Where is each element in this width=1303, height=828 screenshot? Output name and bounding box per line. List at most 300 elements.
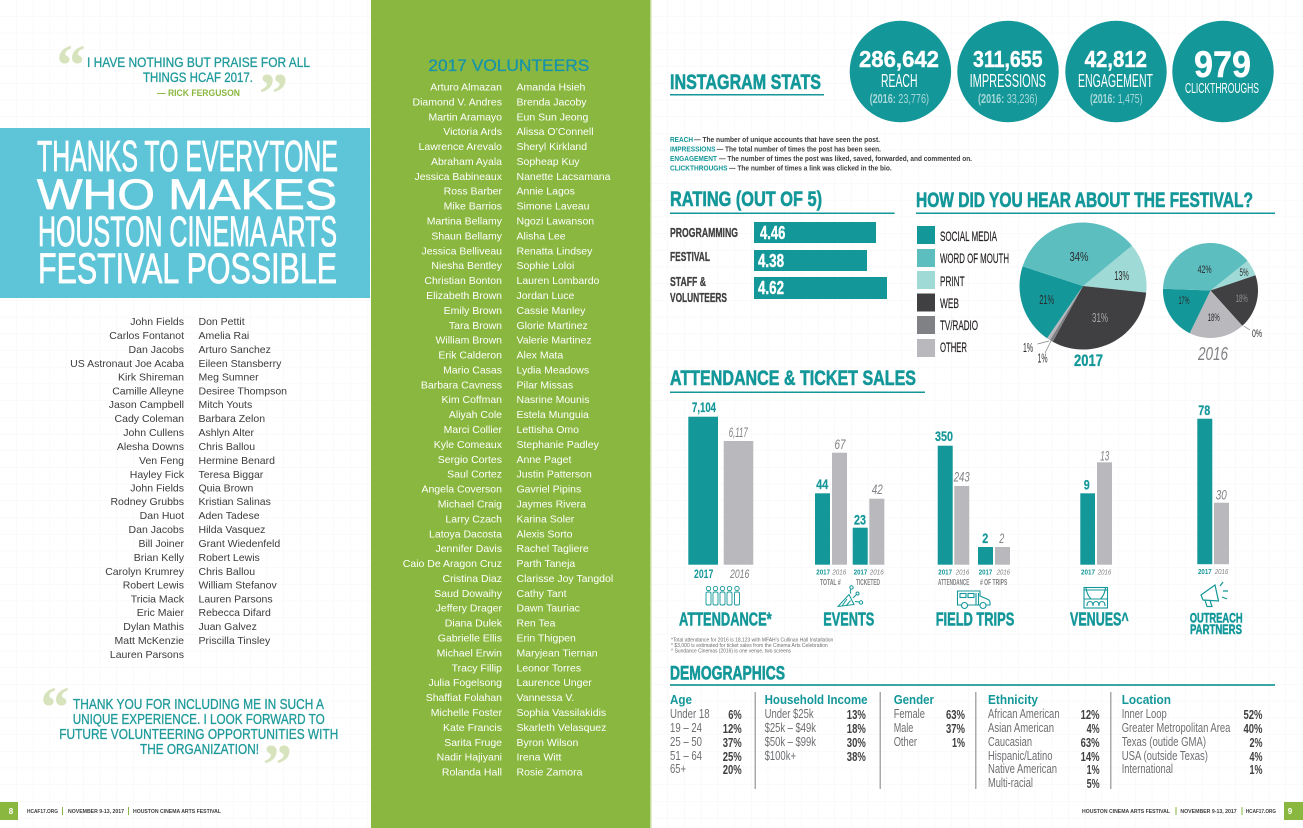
title banner: WHO MAKES — [37, 171, 337, 219]
list: volunteers, left column: Kate Francis — [443, 722, 502, 734]
list: volunteers, right column: Nanette Lacsamana — [516, 171, 611, 183]
list: volunteers, left column: Elizabeth Brown — [426, 290, 502, 302]
title banner: FESTIVAL POSSIBLE — [38, 245, 337, 293]
list: volunteers, right column: Renatta Lindsey — [516, 245, 593, 257]
list: volunteers, right column: Glorie Martinez — [516, 320, 588, 332]
list: volunteers, right column: Clarisse Joy Tangdol — [516, 573, 613, 585]
pie chart: 2016 — [1163, 243, 1262, 364]
quote: Rick Ferguson: — RICK FERGUSON — [157, 88, 240, 99]
table: gender — [894, 692, 965, 750]
heading: demographics: DEMOGRAPHICS — [670, 664, 785, 684]
stat circle: impressions: 311,655 — [973, 46, 1042, 72]
list: volunteers, left column: Victoria Ards — [443, 126, 502, 138]
table: ethnicity: Multi-racial — [988, 775, 1033, 790]
list: thank-you names, left column: Lauren Parsons — [110, 649, 184, 661]
heading: 2017 volunteers: 2017 VOLUNTEERS — [428, 56, 589, 75]
list: thank-you names, right column: Mitch Youts — [198, 399, 252, 411]
quote: volunteer thank you: THANK YOU FOR INCLUDING ME IN SUCH A — [73, 697, 324, 713]
bar chart: rating: 4.38 — [758, 251, 784, 271]
list: volunteers, left column: Barbara Cavness — [421, 379, 502, 391]
list: volunteers, left column: Marci Collier — [444, 424, 502, 436]
list: volunteers, right column: Laurence Unger — [516, 677, 592, 689]
table: household income: 38% — [847, 750, 866, 764]
list: volunteers, left column: Jeffery Drager — [436, 603, 502, 615]
table: ethnicity: African American — [988, 706, 1060, 721]
list: volunteers, right column: Sopheap Kuy — [516, 156, 580, 168]
footer: right page: HCAF17.ORG — [1246, 809, 1276, 815]
list: volunteers, left column: Tracy Fillip — [452, 662, 502, 674]
table: ethnicity: 1% — [1087, 763, 1100, 777]
legend: source of awareness: WORD OF MOUTH — [940, 250, 1009, 266]
table: gender: 37% — [946, 722, 965, 736]
quote: Rick Ferguson: I HAVE NOTHING BUT PRAISE FOR ALL — [87, 55, 310, 70]
list: volunteers, left column: Julia Fogelsong — [428, 677, 502, 689]
list: thank-you names, left column: Bill Joiner — [138, 538, 184, 550]
bar chart: rating: FESTIVAL — [670, 249, 710, 264]
bar chart: venues: 2016 — [1097, 568, 1112, 576]
icon: party popper — [838, 586, 863, 606]
list: thank-you names, left column: Ven Feng — [139, 455, 184, 467]
list: thank-you names, left column: Brian Kelly — [134, 552, 185, 564]
list: volunteers, left column — [403, 82, 503, 778]
list: thank-you names, left column: Kirk Shireman — [118, 372, 184, 384]
table: age: 12% — [723, 722, 742, 736]
quote: volunteer thank you: “ — [40, 674, 70, 740]
list: thank-you names, left column: Camille Alleyne — [112, 386, 184, 398]
bar chart: venues — [1070, 448, 1129, 630]
list: volunteers, right column: Sheryl Kirkland — [516, 141, 587, 153]
pie chart: 2017: 34% — [1070, 249, 1089, 264]
list: thank-you names, left column: Carlos Fontanot — [109, 330, 184, 342]
legend: source of awareness: WEB — [940, 295, 959, 311]
legend: source of awareness: OTHER — [940, 339, 967, 355]
text block: metric definitions: — The number of times a link was clicked in the bio. — [729, 164, 892, 172]
table: location: Texas (outide GMA) — [1122, 734, 1206, 749]
quote: Rick Ferguson — [56, 32, 310, 126]
table: location: Location — [1122, 692, 1171, 707]
list: thank-you names, left column: Dan Jacobs — [129, 524, 184, 536]
pie chart: 2016: 5% — [1240, 267, 1249, 279]
label: events: EVENTS — [823, 609, 874, 630]
pie chart: 2017: 13% — [1114, 268, 1129, 283]
list: volunteers, right column: Alexis Sorto — [516, 528, 573, 540]
list: thank-you names, right column: Amelia Rai — [198, 330, 249, 342]
footnotes — [671, 638, 833, 654]
bar chart: field trips: 243 — [953, 468, 970, 484]
stat circle: reach: (2016: 23,776) — [870, 91, 929, 106]
stat circle: engagement: (2016: 1,475) — [1090, 91, 1142, 106]
list: volunteers, left column: Saud Dowaihy — [434, 588, 503, 600]
text block: metric definitions: IMPRESSIONS — [670, 144, 716, 154]
pie chart: 2017: 1% — [1023, 340, 1033, 355]
bar chart: outreach partners: PARTNERS — [1190, 621, 1242, 637]
list: volunteers, left column: Larry Czach — [445, 513, 502, 525]
list: volunteers, right column: Lauren Lombardo — [516, 275, 600, 287]
list: volunteers, right column: Lettisha Omo — [516, 424, 579, 436]
stat circle: impressions: (2016: 33,236) — [978, 91, 1038, 106]
table: ethnicity — [988, 692, 1100, 791]
footer: left page: NOVEMBER 9-13, 2017 — [68, 809, 124, 815]
bar chart: venues: 9 — [1084, 476, 1090, 492]
list: volunteers, left column: Jessica Belliveau — [421, 245, 502, 257]
table: age — [670, 692, 742, 777]
footnotes: ^ Sundance Cinemas (2016) is one venue, two screens — [671, 648, 791, 654]
list: volunteers, right column: Simone Laveau — [516, 201, 590, 213]
stat circle: engagement: ENGAGEMENT — [1078, 71, 1153, 91]
bar chart: attendance — [679, 399, 772, 630]
pie chart: 2016: 42% — [1198, 264, 1212, 276]
list: volunteers, left column: Jennifer Davis — [435, 543, 502, 555]
list: volunteers, right column: Rachel Tagliere — [516, 543, 589, 555]
table: household income: 18% — [847, 722, 866, 736]
table: ethnicity: Asian American — [988, 720, 1054, 735]
footer: left page: HOUSTON CINEMA ARTS FESTIVAL — [133, 809, 222, 815]
stat circle: clickthroughs: 979 — [1194, 44, 1251, 85]
footer: right page: NOVEMBER 9-13, 2017 — [1180, 809, 1237, 815]
bar chart: rating: PROGRAMMING — [670, 225, 738, 240]
list: thank-you names, left column: Dan Huot — [140, 510, 184, 522]
list: volunteers, right column: Alex Mata — [516, 350, 563, 362]
pie chart: 2016: 18% — [1208, 312, 1220, 324]
quote: volunteer thank you — [40, 674, 338, 798]
list: thank-you names, right column — [198, 316, 287, 647]
list: volunteers, right column: Byron Wilson — [516, 737, 579, 749]
list: volunteers, right column: Brenda Jacoby — [516, 96, 587, 108]
list: volunteers, left column: Diamond V. Andres — [412, 96, 502, 108]
list: volunteers, right column: Gavriel Pipins — [516, 484, 581, 496]
table: household income — [765, 692, 868, 764]
list: thank-you names, right column: Barbara Zelon — [198, 413, 265, 425]
list: volunteers, right column — [516, 82, 613, 778]
pie chart: 2017: 2017 — [1074, 351, 1103, 370]
list: thank-you names, right column: Quia Brown — [198, 482, 254, 494]
table: location: 52% — [1244, 708, 1262, 722]
table: location: 1% — [1250, 763, 1262, 777]
list: volunteers, left column: Latoya Dacosta — [429, 528, 502, 540]
table: gender: Other — [894, 734, 917, 749]
bar chart: field trips: 2016 — [955, 568, 970, 576]
list: volunteers, left column: Abraham Ayala — [431, 156, 502, 168]
table: gender: Gender — [894, 692, 934, 707]
panel: 2017 volunteers — [371, 0, 650, 828]
bar chart: outreach partners: 78 — [1198, 402, 1210, 418]
legend: source of awareness: PRINT — [940, 273, 965, 289]
icon: theater stage — [1084, 588, 1108, 608]
list: volunteers, left column: Sarita Fruge — [444, 737, 502, 749]
list: thank-you names, left column — [70, 316, 185, 661]
footer: left page — [0, 802, 222, 820]
list: volunteers, right column: Valerie Martinez — [516, 335, 592, 347]
list: volunteers, left column: Erik Calderon — [438, 350, 502, 362]
list: volunteers, left column: Diana Dulek — [445, 618, 503, 630]
list: volunteers, left column: Jessica Babineaux — [414, 171, 503, 183]
label: attendance: ATTENDANCE* — [679, 609, 772, 630]
legend: source of awareness: TV/RADIO — [940, 317, 978, 333]
list: volunteers, left column: Cristina Diaz — [442, 573, 502, 585]
bar chart: attendance: 7,104 — [692, 399, 716, 415]
table: household income: 30% — [847, 736, 866, 750]
pie chart: 2017: 31% — [1092, 310, 1108, 325]
list: volunteers, right column: Irena Witt — [516, 752, 562, 764]
list: volunteers, left column: Niesha Bentley — [431, 260, 503, 272]
title banner: HOUSTON CINEMA ARTS — [38, 208, 337, 256]
text block: metric definitions: CLICKTHROUGHS — [670, 164, 728, 172]
list: volunteers, right column: Pilar Missas — [516, 379, 573, 391]
bar chart: field trips: # OF TRIPS — [980, 578, 1008, 587]
table: age: 25% — [723, 750, 742, 764]
table: gender: 63% — [946, 708, 965, 722]
bar chart: outreach partners: 2017 — [1198, 567, 1212, 576]
bar chart: events: 23 — [854, 512, 866, 528]
list: volunteers, left column: Rolanda Hall — [442, 766, 502, 778]
label: outreach partners: OUTREACH — [1190, 610, 1243, 626]
bar chart: field trips: ATTENDANCE — [938, 578, 970, 587]
list: thank-you names, left column: US Astronaut Joe Acaba — [70, 358, 184, 370]
list: volunteers, left column: William Brown — [435, 335, 502, 347]
bar chart: attendance: 2017 — [694, 567, 714, 581]
list: volunteers, left column: Michael Craig — [438, 498, 502, 510]
list: thank-you names, right column: Aden Tadese — [198, 510, 260, 522]
list: thank-you names, left column: Tricia Mack — [131, 594, 185, 606]
table: location — [1122, 692, 1262, 777]
list: volunteers, right column: Parth Taneja — [516, 558, 575, 570]
list: volunteers, left column: Mike Barrios — [444, 201, 502, 213]
table: ethnicity: 63% — [1081, 736, 1100, 750]
list: thank-you names, right column: Hermine Benard — [198, 455, 275, 467]
stat circle: reach: 286,642 — [859, 46, 939, 72]
icon: megaphone — [1201, 582, 1228, 606]
table: ethnicity: Caucasian — [988, 734, 1032, 749]
table: age: 37% — [723, 736, 742, 750]
table: gender: Male — [894, 720, 913, 735]
table: household income: Household Income — [765, 692, 868, 707]
bar chart: outreach partners — [1190, 402, 1243, 637]
list: volunteers, right column: Alisha Lee — [516, 230, 566, 242]
list: thank-you names, left column: John Fields — [130, 482, 184, 494]
bar chart: events: TICKETED — [856, 578, 880, 587]
pie chart: 2016: 2016 — [1197, 344, 1229, 364]
list: volunteers, left column: Michelle Foster — [431, 707, 502, 719]
table: gender: 1% — [952, 736, 965, 750]
pie chart: 2017 — [1020, 222, 1147, 370]
list: thank-you names, left column: Cady Coleman — [115, 413, 184, 425]
bar chart: field trips: 2 — [999, 530, 1004, 546]
list: thank-you names, right column: Eileen Stansberry — [198, 358, 282, 370]
bar chart: rating: 4.62 — [758, 278, 784, 298]
table: age: 65+ — [670, 761, 686, 776]
list: volunteers, right column: Leonor Torres — [516, 662, 581, 674]
list: volunteers, right column: Rosie Zamora — [516, 766, 583, 778]
table: household income: $25k – $49k — [765, 720, 816, 735]
bar chart: attendance: 2016 — [729, 567, 750, 581]
list: thank-you names, right column: Chris Ballou — [198, 566, 255, 578]
list: thank-you names, left column: Matt McKenzie — [115, 635, 184, 647]
list: volunteers, right column: Vannessa V. — [516, 692, 574, 704]
table: location: International — [1122, 761, 1173, 776]
bar chart: attendance: 6,117 — [729, 424, 748, 440]
table: location: Greater Metropolitan Area — [1122, 720, 1231, 735]
list: volunteers, left column: Kyle Comeaux — [434, 439, 503, 451]
footer: left page: HCAF17.ORG — [27, 809, 58, 815]
bar chart: field trips — [935, 428, 1014, 630]
list: thank-you names, right column: Robert Lewis — [198, 552, 260, 564]
list: volunteers, left column: Lawrence Arevalo — [419, 141, 502, 153]
pie chart: 2017: 21% — [1039, 292, 1054, 307]
bar chart: field trips: 350 — [935, 428, 953, 444]
list: thank-you names, left column: John Cullens — [123, 427, 184, 439]
list: volunteers, right column: Ren Tea — [516, 618, 556, 630]
bar chart: rating: 4.46 — [760, 223, 785, 243]
list: volunteers, right column: Stephanie Padley — [516, 439, 600, 451]
stat circle: impressions — [957, 21, 1059, 122]
pie chart: 2017: 1% — [1038, 350, 1048, 366]
quote: volunteer thank you: FUTURE VOLUNTEERING OPPORTUNITIES WITH — [59, 727, 338, 743]
list: volunteers, right column: Cassie Manley — [516, 305, 586, 317]
bar chart: outreach partners: 2016 — [1214, 567, 1229, 576]
text block: metric definitions — [670, 135, 972, 172]
list: volunteers, left column: Shaffiat Folahan — [426, 692, 502, 704]
list: thank-you names, right column: Desiree Thompson — [198, 386, 287, 398]
text block: metric definitions: REACH — [670, 135, 693, 144]
list: volunteers, right column: Dawn Tauriac — [516, 603, 580, 615]
list: volunteers, left column: Martina Bellamy — [427, 216, 503, 228]
table: gender: Female — [894, 706, 925, 721]
heading: attendance and ticket sales: ATTENDANCE & TICKET SALES — [670, 367, 916, 390]
legend: source of awareness — [917, 226, 1009, 357]
footer: right page — [1082, 802, 1303, 820]
pie chart: 2016: 0% — [1252, 328, 1262, 340]
quote: Rick Ferguson: THINGS HCAF 2017. — [143, 70, 253, 85]
list: volunteers, right column: Cathy Tant — [516, 588, 567, 600]
bar chart: events — [815, 436, 884, 630]
table: household income: $100k+ — [765, 748, 796, 763]
list: volunteers, right column: Karina Soler — [516, 513, 575, 525]
list: thank-you names, right column: Arturo Sanchez — [198, 344, 271, 356]
list: thank-you names, left column: Hayley Fick — [130, 469, 185, 481]
table: location: USA (outside Texas) — [1122, 748, 1208, 763]
list: thank-you names, left column: Robert Lewis — [123, 580, 184, 592]
legend: source of awareness: SOCIAL MEDIA — [940, 228, 997, 244]
list: volunteers, right column: Alissa O’Connell — [516, 126, 594, 138]
table: age: 51 – 64 — [670, 748, 702, 763]
list: thank-you names, right column: Ashlyn Alter — [198, 427, 254, 439]
icon: bus — [958, 591, 990, 608]
table: household income: $50k – $99k — [765, 734, 816, 749]
table: ethnicity: Hispanic/Latino — [988, 748, 1052, 763]
title banner — [0, 128, 370, 298]
list: thank-you names, left column: Alesha Downs — [117, 441, 184, 453]
list: volunteers, right column: Amanda Hsieh — [516, 82, 586, 94]
bar chart: rating — [670, 222, 887, 305]
stat circle: reach — [850, 21, 951, 122]
list: volunteers, right column: Sophia Vassilakidis — [516, 707, 606, 719]
table: ethnicity: 5% — [1087, 777, 1100, 791]
list: volunteers, right column: Eun Sun Jeong — [516, 111, 588, 123]
list: volunteers, right column: Justin Patterson — [516, 469, 592, 481]
text block: metric definitions: ENGAGEMENT — [670, 154, 717, 163]
list: volunteers, left column: Michael Erwin — [437, 647, 502, 659]
list: thank-you names, right column: Rebecca Difard — [198, 607, 271, 619]
list: thank-you names, right column: Chris Ballou — [198, 441, 255, 453]
list: volunteers, left column: Christian Bonton — [424, 275, 502, 287]
list: thank-you names, right column: Teresa Biggar — [198, 469, 264, 481]
list: thank-you names, right column: Priscilla Tinsley — [198, 635, 271, 647]
table: age: 19 – 24 — [670, 720, 702, 735]
list: volunteers, left column: Aliyah Cole — [449, 409, 502, 421]
table: age: Under 18 — [670, 706, 710, 721]
list: thank-you names, left column: Jason Campbell — [109, 399, 184, 411]
list: volunteers, right column: Annie Lagos — [516, 186, 575, 198]
bar chart: field trips: 2016 — [996, 568, 1011, 576]
list: volunteers, right column: Maryjean Tiernan — [516, 647, 598, 659]
list: volunteers, left column: Arturo Almazan — [430, 82, 502, 94]
table: ethnicity: 14% — [1081, 750, 1100, 764]
table: location: Inner Loop — [1122, 706, 1167, 721]
list: volunteers, right column: Skarleth Velasquez — [516, 722, 606, 734]
table: age: 6% — [728, 708, 742, 722]
bar chart: outreach partners: 30 — [1216, 486, 1227, 502]
footer: left page: 8 — [9, 807, 14, 816]
bar chart: rating: STAFF & — [670, 274, 706, 289]
quote: Rick Ferguson: ” — [259, 62, 288, 126]
list: thank-you names, right column: William Stefanov — [198, 580, 277, 592]
list: volunteers, right column: Jordan Luce — [516, 290, 574, 302]
bar chart: events: 42 — [872, 481, 883, 497]
table: ethnicity: Native American — [988, 761, 1057, 776]
list: volunteers, right column: Anne Paget — [516, 454, 571, 466]
title banner: THANKS TO EVERYTONE — [37, 132, 338, 181]
table: ethnicity: 12% — [1081, 708, 1100, 722]
bar chart: events: 2017 — [854, 568, 867, 576]
list: thank-you names, left column: Dan Jacobs — [129, 344, 184, 356]
bar chart: events: TOTAL # — [820, 578, 841, 587]
footer: right page: 9 — [1288, 807, 1293, 816]
list: volunteers, right column: Jaymes Rivera — [516, 498, 586, 510]
list: volunteers, right column: Erin Thigpen — [516, 632, 576, 644]
list: volunteers, right column: Sophie Loloi — [516, 260, 574, 272]
label: field trips: FIELD TRIPS — [936, 609, 1014, 630]
list: volunteers, left column: Caio De Aragon Cruz — [403, 558, 502, 570]
list: volunteers, left column: Nadir Hajiyani — [437, 752, 502, 764]
table: ethnicity: 4% — [1087, 722, 1100, 736]
list: thank-you names, right column: Lauren Parsons — [198, 594, 273, 606]
list: thank-you names, right column: Juan Galvez — [198, 621, 257, 633]
list: thank-you names, right column: Don Pettit — [198, 316, 245, 328]
text block: metric definitions: — The total number of times the post has been seen. — [717, 144, 881, 154]
list: volunteers, left column: Martin Aramayo — [428, 111, 502, 123]
list: volunteers, left column: Shaun Bellamy — [431, 230, 503, 242]
heading: Instagram stats: INSTAGRAM STATS — [670, 71, 821, 94]
table: age: 25 – 50 — [670, 734, 702, 749]
list: volunteers, left column: Sergio Cortes — [438, 454, 502, 466]
list: volunteers, right column: Lydia Meadows — [516, 364, 589, 376]
text block: metric definitions: — The number of times the post was liked, saved, forwarded, and commented on. — [719, 154, 972, 163]
list: volunteers, left column: Mario Casas — [443, 364, 502, 376]
footnotes: * $3,000 is estimated for ticket sales from the Cinema Arts Celebration — [671, 643, 828, 649]
list: thank-you names, right column: Grant Wiedenfeld — [198, 538, 280, 550]
stat circle: reach: REACH — [881, 71, 918, 91]
bar chart: field trips: 2017 — [979, 568, 992, 576]
table: location: 4% — [1250, 750, 1262, 764]
list: volunteers, right column: Ngozi Lawanson — [516, 216, 594, 228]
table: ethnicity: Ethnicity — [988, 692, 1039, 707]
pie chart: 2016: 18% — [1236, 293, 1248, 305]
list: thank-you names, right column: Kristian Salinas — [198, 496, 271, 508]
heading: rating: RATING (OUT OF 5) — [670, 188, 822, 211]
bar chart: events: 67 — [834, 436, 846, 452]
list: thank-you names, left column: Dylan Mathis — [123, 621, 184, 633]
list: thank-you names, left column: Rodney Grubbs — [110, 496, 184, 508]
